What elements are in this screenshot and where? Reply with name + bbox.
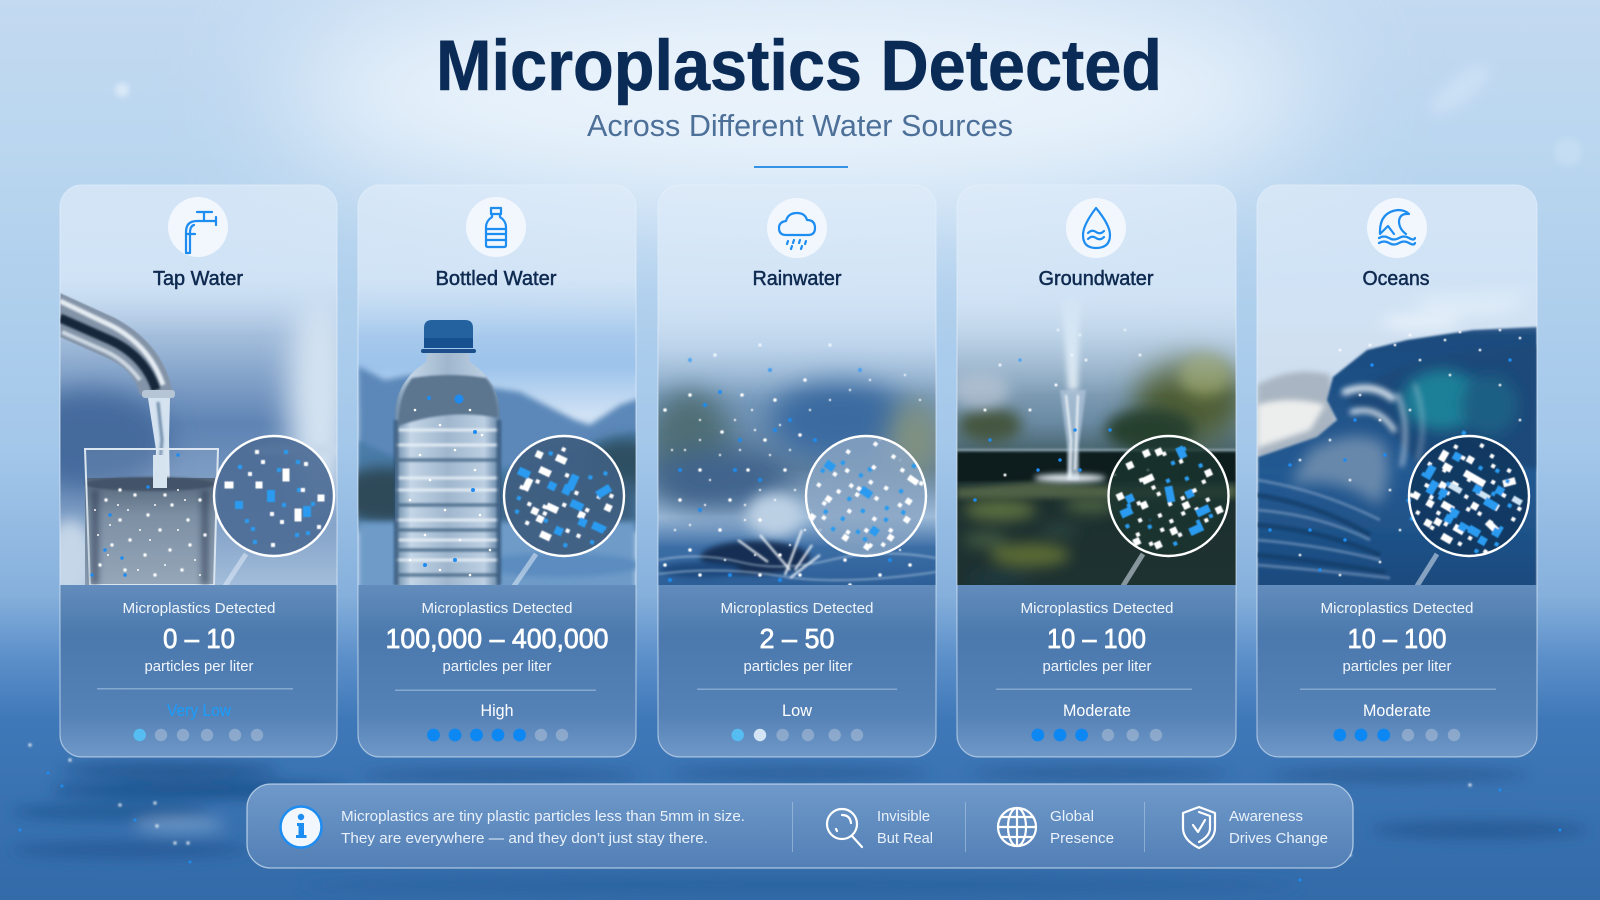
- photo: faucet pouring into glass: [60, 292, 337, 585]
- card: groundwater: [950, 185, 1245, 757]
- level dots: [134, 729, 263, 741]
- label: oceans: Oceans: [1362, 268, 1430, 290]
- icon: bottle: [466, 197, 526, 257]
- level dots: [1333, 729, 1460, 741]
- footer panel: [247, 784, 1353, 868]
- lower stats panel: [60, 585, 337, 757]
- icon: info: [280, 806, 322, 848]
- magnifier: bottled water sample: [502, 436, 627, 557]
- level dots: [732, 729, 863, 741]
- lower stats panel: [658, 585, 936, 757]
- stat: unit: particles per liter: [744, 658, 852, 675]
- info text: Microplastics are tiny plastic particles less than 5mm in size.: [341, 808, 745, 825]
- photo: spring and mossy rock: [957, 320, 1236, 585]
- level: moderate: Moderate: [1363, 701, 1431, 720]
- stat: unit: particles per liter: [442, 658, 552, 675]
- stat: unit: particles per liter: [144, 658, 254, 675]
- stat: microplastics label: Microplastics Detected: [422, 600, 572, 617]
- stat: microplastics label: Microplastics Detected: [1020, 600, 1174, 617]
- info text: [341, 808, 745, 847]
- label: bottled water: Bottled Water: [436, 268, 557, 290]
- stat: microplastics label: Microplastics Detected: [122, 600, 276, 617]
- icon: globe: [998, 808, 1036, 846]
- level: low: Low: [782, 701, 813, 720]
- stat: value: 10 – 100: [1348, 623, 1446, 654]
- text: invisible but real: But Real: [877, 830, 933, 847]
- stat: value: 100,000 – 400,000: [386, 623, 608, 654]
- stat: microplastics label: Microplastics Detected: [1320, 600, 1474, 617]
- text: global presence: Global: [1050, 808, 1094, 825]
- stat: value: 0 – 10: [163, 623, 235, 654]
- icon: shield: [1183, 807, 1215, 848]
- level dots: [1031, 729, 1162, 741]
- lower stats panel: [957, 585, 1236, 757]
- text: global presence: [1050, 808, 1114, 847]
- text: global presence: Presence: [1050, 830, 1114, 847]
- level: moderate: Moderate: [1063, 701, 1131, 720]
- title underline: [754, 166, 848, 168]
- magnifier: groundwater sample: [1103, 433, 1230, 559]
- stat: value: 10 – 100: [1047, 623, 1146, 654]
- text: awareness drives change: Drives Change: [1229, 830, 1328, 847]
- stat: value: 2 – 50: [760, 623, 834, 654]
- info text: They are everywhere — and they don’t just stay there.: [341, 830, 708, 847]
- magnifier: oceans sample: [1402, 426, 1538, 563]
- level: very low: Very Low: [167, 701, 232, 720]
- text: invisible but real: Invisible: [877, 808, 930, 825]
- text: awareness drives change: [1229, 808, 1328, 847]
- card: tap water: [59, 184, 338, 758]
- level dots: [427, 729, 568, 741]
- lower stats panel: [1257, 585, 1537, 757]
- card: rainwater: [650, 185, 941, 757]
- icon: wave: [1367, 198, 1427, 258]
- icon: faucet: [168, 197, 228, 257]
- magnifier: tap water sample: [214, 436, 334, 556]
- subtitle: Across Different Water Sources: [587, 108, 1013, 143]
- stat: unit: particles per liter: [1042, 658, 1152, 675]
- lower stats panel: [358, 585, 636, 757]
- photo: rain splash: [658, 328, 936, 585]
- photo: water bottle with mountains: [358, 295, 636, 585]
- label: rainwater: Rainwater: [752, 268, 842, 290]
- icon: water drop: [1066, 198, 1126, 258]
- photo: ocean wave: [1257, 296, 1537, 585]
- title: Microplastics Detected: [436, 27, 1162, 106]
- magnifier: rainwater sample: [798, 425, 934, 562]
- label: tap water: Tap Water: [153, 268, 243, 290]
- text: invisible but real: [877, 808, 933, 847]
- icon: rain cloud: [767, 198, 827, 258]
- card: oceans: [1257, 185, 1540, 757]
- stat: microplastics label: Microplastics Detected: [720, 600, 874, 617]
- card: bottled water: [357, 184, 637, 758]
- level: high: High: [480, 701, 514, 720]
- label: groundwater: Groundwater: [1038, 268, 1154, 290]
- text: awareness drives change: Awareness: [1229, 808, 1303, 825]
- icon: magnifier: [827, 809, 862, 847]
- stat: unit: particles per liter: [1342, 658, 1452, 675]
